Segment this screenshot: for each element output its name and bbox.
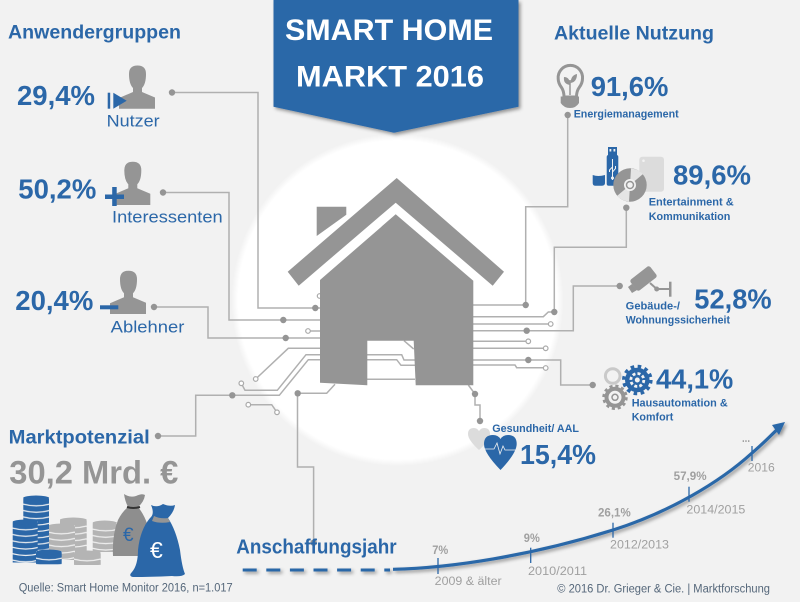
circuit traces xyxy=(151,89,630,546)
item: Energiemanagement: Energiemanagement xyxy=(574,108,679,120)
icon: gears xyxy=(604,367,651,408)
item: Gesundheit: Gesundheit/ AAL xyxy=(492,423,579,435)
percent labels: 57,9% xyxy=(674,471,707,483)
heading: Anwendergruppen: Anwendergruppen xyxy=(8,23,181,44)
icon: light bulb xyxy=(558,65,583,108)
heading: Marktpotenzial: Marktpotenzial xyxy=(9,427,150,448)
percent labels: ... xyxy=(742,433,750,445)
percent labels: 7% xyxy=(432,545,448,557)
panel: Aktuelle Nutzung xyxy=(468,23,772,470)
item: Hausautomation: Hausautomation & xyxy=(632,398,728,410)
title banner xyxy=(274,0,518,133)
icon: money bags xyxy=(113,494,185,577)
item: Gesundheit: 15,4% xyxy=(520,439,596,470)
group: Nutzer: Nutzer xyxy=(107,112,160,131)
percent labels: 26,1% xyxy=(598,508,631,520)
panel: Marktpotenzial xyxy=(9,427,185,577)
group: Interessenten xyxy=(18,162,223,226)
year labels xyxy=(435,463,775,588)
item: Hausautomation: 44,1% xyxy=(656,364,733,395)
year labels: 2010/2011 xyxy=(528,566,587,578)
group: Interessenten: Interessenten xyxy=(112,207,223,226)
item: Entertainment und Kommunikation: Entertainment & xyxy=(649,197,734,209)
copyright note: © 2016 Dr. Grieger & Cie. | Marktforschung xyxy=(557,584,770,596)
item: Energiemanagement: 91,6% xyxy=(591,71,668,102)
icon: hearts xyxy=(468,428,517,470)
title banner: MARKT 2016 xyxy=(296,61,484,94)
year labels: 2009 & älter xyxy=(435,576,502,588)
heading: Aktuelle Nutzung: Aktuelle Nutzung xyxy=(554,23,714,44)
icon: money bags: € xyxy=(150,537,163,563)
icon: coin stacks xyxy=(13,496,117,565)
white glow circle xyxy=(232,134,564,466)
item: Gebäudesicherheit xyxy=(626,265,772,326)
item: Entertainment und Kommunikation: 89,6% xyxy=(673,159,751,190)
percent labels: 9% xyxy=(524,533,540,545)
item: Energiemanagement xyxy=(558,65,679,120)
percent labels xyxy=(432,433,750,557)
item: Gebäudesicherheit: 52,8% xyxy=(694,283,772,314)
group: Ablehner: Ablehner xyxy=(111,317,185,336)
year labels: 2014/2015 xyxy=(686,504,745,516)
icon: media devices xyxy=(593,147,664,202)
group: Nutzer: 29,4% xyxy=(17,80,95,111)
item: Entertainment und Kommunikation xyxy=(593,147,751,223)
arrow: growth curve xyxy=(243,422,785,570)
item: Gebäudesicherheit: Gebäude-/ xyxy=(626,300,680,312)
panel: Anwendergruppen xyxy=(8,23,223,336)
item: Gesundheit xyxy=(468,423,596,470)
source note: Quelle: Smart Home Monitor 2016, n=1.017 xyxy=(19,583,233,595)
tick marks xyxy=(438,446,752,574)
group: Ablehner: 20,4% xyxy=(15,285,93,316)
item: Gebäudesicherheit: Wohnungssicherheit xyxy=(626,314,730,326)
heading: Anschaffungsjahr: Anschaffungsjahr xyxy=(236,536,397,558)
item: Hausautomation: Komfort xyxy=(632,412,674,424)
title banner: SMART HOME xyxy=(285,14,493,47)
group: Nutzer xyxy=(17,66,160,131)
panel: Anschaffungsjahr timeline xyxy=(236,422,785,588)
value: 30,2 Mrd. Euro: 30,2 Mrd. € xyxy=(9,454,179,490)
group: Ablehner xyxy=(15,271,185,336)
item: Entertainment und Kommunikation: Kommunikation xyxy=(649,211,731,223)
year labels: 2016 xyxy=(748,463,775,475)
group: Interessenten: 50,2% xyxy=(18,173,96,204)
house icon xyxy=(288,178,504,385)
year labels: 2012/2013 xyxy=(610,540,669,552)
icon: money bags: € xyxy=(123,525,134,546)
item: Hausautomation xyxy=(604,364,733,424)
icon: security camera xyxy=(628,265,672,297)
